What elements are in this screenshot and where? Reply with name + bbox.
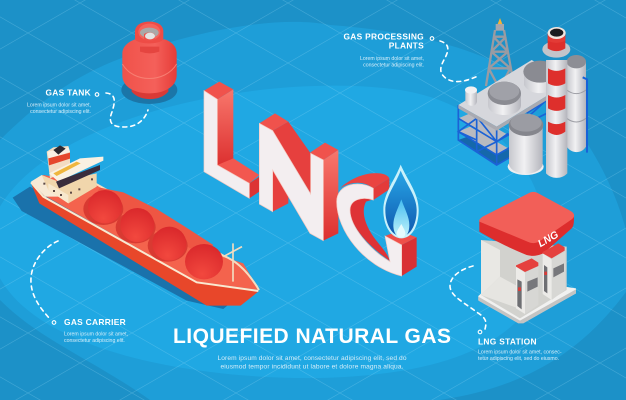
dashed connector: gas tank bbox=[95, 93, 148, 127]
label: gas processing plants: PLANTS bbox=[389, 40, 424, 50]
letter N bbox=[259, 113, 338, 241]
lettering: LNG bbox=[204, 82, 419, 276]
fuel pump rear bbox=[543, 243, 565, 300]
icon: gas carrier ship bbox=[13, 145, 259, 309]
label: gas processing plants: consectetur adipiscing elit. bbox=[363, 62, 424, 68]
ship shadow bbox=[13, 187, 230, 309]
large tank bbox=[508, 158, 544, 175]
label: gas carrier: Lorem ipsum dolor sit amet, bbox=[64, 332, 128, 338]
title: LIQUEFIED NATURAL GAS bbox=[173, 325, 451, 348]
dashed connector: LNG station bbox=[450, 266, 486, 334]
platform deck bbox=[458, 60, 570, 127]
fuel pump front bbox=[516, 258, 538, 314]
icon: gas processing plant bbox=[458, 18, 587, 178]
label: gas processing plants bbox=[343, 32, 424, 68]
station roof: LNG bbox=[536, 229, 561, 250]
platform frame bbox=[458, 100, 547, 165]
deck bbox=[32, 175, 259, 290]
icon: LNG station bbox=[478, 192, 576, 323]
dashed connector: gas carrier bbox=[31, 241, 58, 324]
derrick bbox=[486, 30, 513, 86]
description bbox=[218, 355, 407, 370]
letter L bbox=[204, 82, 259, 198]
superstructure bbox=[31, 145, 103, 203]
label: gas tank: GAS TANK bbox=[45, 88, 91, 98]
label: gas carrier: consectetur adipiscing elit. bbox=[64, 338, 125, 344]
label: LNG station: LNG STATION bbox=[478, 336, 537, 346]
label: LNG station: tetur adipiscing elit, sed do eiusmo. bbox=[478, 356, 559, 362]
letter G bbox=[337, 173, 417, 276]
chimney bbox=[546, 60, 567, 178]
icon: gas flame drop bbox=[383, 165, 419, 238]
description: eiusmod tempor incididunt ut labore et dolore magna aliqua. bbox=[220, 364, 404, 370]
tanks on deck bbox=[488, 93, 521, 115]
mast bbox=[223, 243, 242, 282]
label: LNG station bbox=[478, 336, 562, 362]
tank domes bbox=[83, 188, 223, 279]
hull bbox=[31, 182, 259, 306]
label: gas processing plants: GAS PROCESSING bbox=[343, 32, 424, 42]
label: gas tank bbox=[27, 88, 91, 115]
dashed connector: gas processing plants bbox=[430, 37, 478, 82]
icon: gas tank bbox=[121, 22, 177, 104]
label: gas carrier: GAS CARRIER bbox=[64, 317, 126, 327]
label: gas tank: Lorem ipsum dolor sit amet, bbox=[27, 102, 91, 108]
station base bbox=[478, 277, 576, 323]
right tower bbox=[567, 62, 586, 152]
label: LNG station: Lorem ipsum dolor sit amet, consec- bbox=[478, 350, 562, 356]
label: gas tank: consectetur adipiscing elit. bbox=[30, 109, 91, 115]
station walls bbox=[481, 240, 567, 318]
label: gas carrier bbox=[64, 317, 128, 344]
label: gas processing plants: Lorem ipsum dolor sit amet, bbox=[360, 56, 424, 62]
description: Lorem ipsum dolor sit amet, consectetur adipiscing elit, sed do bbox=[218, 355, 407, 362]
